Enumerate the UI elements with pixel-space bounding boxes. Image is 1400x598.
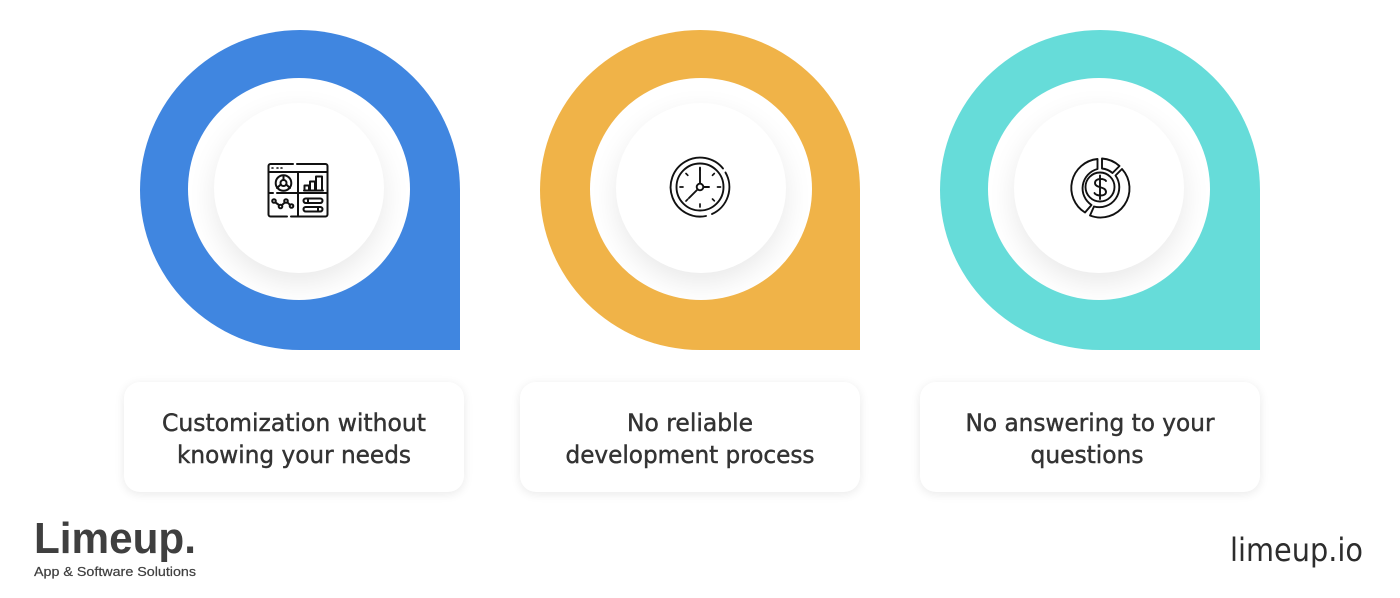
text: development: development process (566, 441, 814, 469)
text: questions: No answering to your (966, 409, 1215, 437)
text: questions: questions (1030, 441, 1144, 469)
text: customization: knowing your needs (177, 441, 411, 469)
logo: Limeup: App & Software Solutions (34, 565, 196, 579)
text: development: No reliable (627, 409, 753, 437)
card: questions (920, 382, 1260, 492)
panel: customization pin (140, 30, 460, 350)
white ring (188, 78, 410, 300)
card: development (520, 382, 860, 492)
card: customization (124, 382, 464, 492)
logo: Limeup: Limeup. (34, 514, 196, 563)
panel: answering questions pin (940, 30, 1260, 350)
white ring (590, 78, 812, 300)
text: limeup.io: limeup.io (1230, 531, 1363, 569)
white ring (988, 78, 1210, 300)
text: customization: Customization without (162, 409, 426, 437)
panel: development process pin (540, 30, 860, 350)
